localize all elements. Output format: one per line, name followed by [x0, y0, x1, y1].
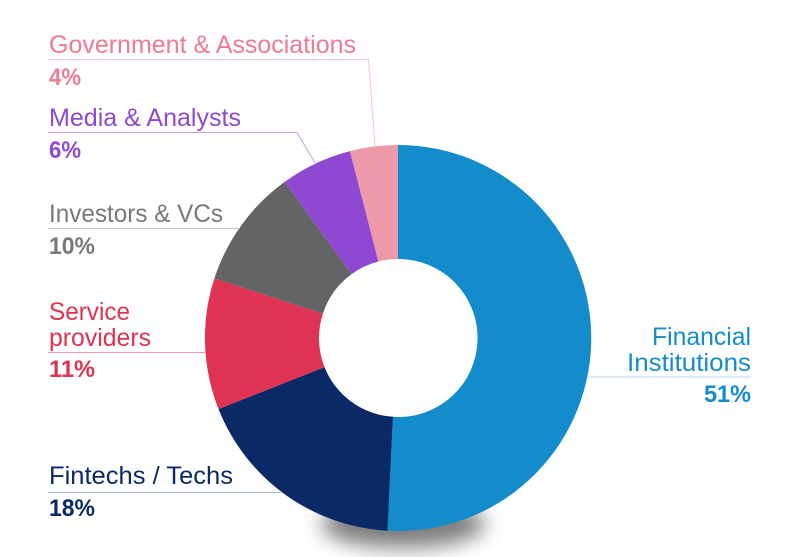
label: Investors & VCs: 10% [49, 233, 95, 260]
label: Service providers: providers [49, 324, 151, 352]
slice: Fintechs / Techs [218, 367, 393, 531]
donut drop shadow [321, 500, 485, 548]
label: Service providers: 11% [49, 356, 95, 383]
label: Fintechs / Techs [48, 462, 281, 522]
slice: Government & Associations [350, 145, 398, 262]
slice: Investors & VCs [214, 182, 352, 314]
label: Government & Associations: Government & Associations [49, 31, 356, 59]
slice: Financial Institutions [388, 145, 591, 531]
donut chart [205, 145, 591, 531]
label: Financial Institutions: 51% [704, 381, 751, 408]
label: Financial Institutions: Institutions [627, 349, 751, 377]
label: Government & Associations [48, 31, 375, 146]
label: Investors & VCs: Investors & VCs [49, 200, 223, 228]
label: Media & Analysts: 6% [49, 137, 81, 164]
label: Investors & VCs [48, 200, 240, 260]
label: Government & Associations: 4% [49, 64, 81, 91]
slice: Media & Analysts [285, 151, 378, 274]
label: Media & Analysts: Media & Analysts [49, 104, 241, 132]
label: Media & Analysts [48, 104, 315, 164]
label: Service providers: Service [49, 298, 130, 326]
label: Fintechs / Techs: Fintechs / Techs [49, 462, 233, 490]
slice: Service providers [205, 278, 324, 409]
label: Financial Institutions [588, 323, 751, 408]
label: Fintechs / Techs: 18% [49, 495, 95, 522]
label: Service providers [48, 298, 205, 383]
label: Financial Institutions: Financial [652, 323, 751, 351]
